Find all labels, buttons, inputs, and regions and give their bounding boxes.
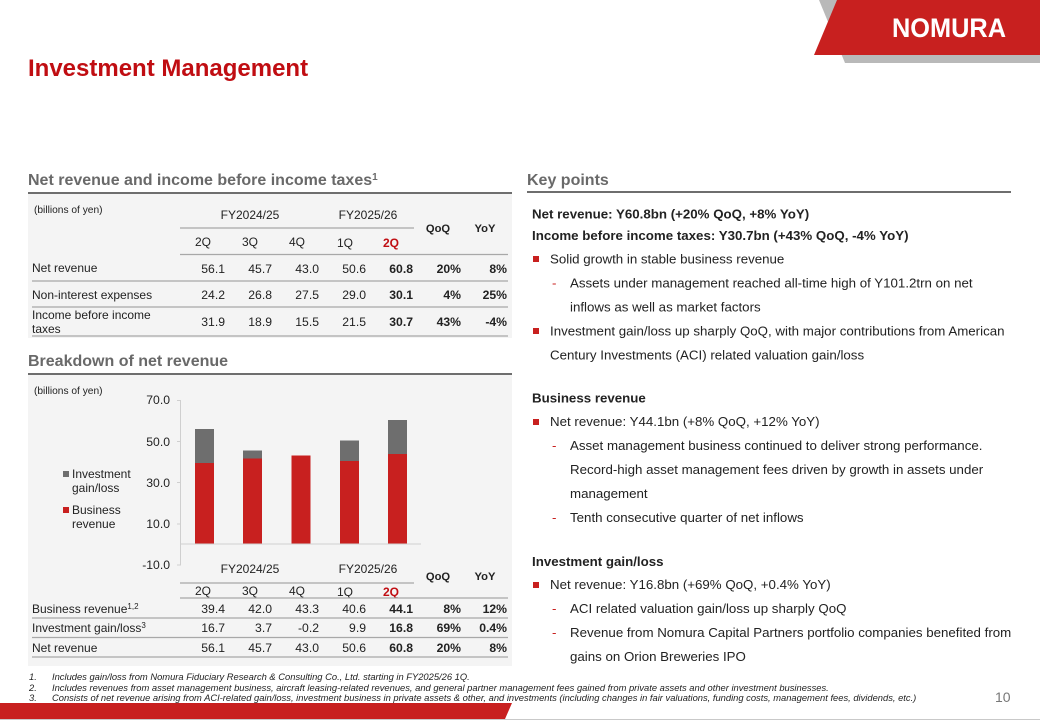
footer band xyxy=(0,703,512,719)
bars xyxy=(195,420,407,544)
section: investment gain/loss: - xyxy=(552,625,556,640)
table row: income before income taxes: taxes xyxy=(32,322,61,336)
heading: breakdown of net revenue: Breakdown of net revenue xyxy=(28,353,228,370)
table row: net revenue: 43.0 xyxy=(295,262,319,276)
table row: income before income taxes: 15.5 xyxy=(295,315,319,329)
table row: net revenue xyxy=(32,261,508,281)
table row: non-interest expenses: 30.1 xyxy=(389,288,413,302)
section: investment gain/loss: Revenue from Nomura Capital Partners portfolio companies benefited from xyxy=(570,625,1011,640)
heading: net revenue and income before income taxes: 1 xyxy=(372,172,378,183)
table header: QoQ xyxy=(426,571,450,583)
heading: key points: Key points xyxy=(527,172,609,189)
table header: YoY xyxy=(475,223,496,235)
table row: net revenue: 60.8 xyxy=(389,262,413,276)
table row: investment gain/loss: 16.7 xyxy=(201,621,225,635)
legend: revenue xyxy=(72,517,116,531)
legend: Investment xyxy=(72,467,131,481)
section: business revenue: Net revenue: Y44.1bn (+8% QoQ, +12% YoY) xyxy=(550,414,820,429)
section: business revenue: - xyxy=(552,510,556,525)
table row: income before income taxes: 21.5 xyxy=(342,315,366,329)
table row: income before income taxes: 31.9 xyxy=(201,315,225,329)
y axis: 10.0 xyxy=(146,517,170,531)
table row: income before income taxes: 30.7 xyxy=(389,315,413,329)
table header: 2Q xyxy=(195,584,211,598)
table header: FY2024/25 xyxy=(221,208,280,222)
table row: business revenue: 39.4 xyxy=(201,602,225,616)
table row: income before income taxes: 18.9 xyxy=(248,315,272,329)
section: investment gain/loss: gains on Orion Breweries IPO xyxy=(570,649,746,664)
table row: business revenue: 44.1 xyxy=(389,602,413,616)
table row: non-interest expenses: Non-interest expenses xyxy=(32,288,152,302)
table row: business revenue: 12% xyxy=(483,602,507,616)
table header xyxy=(180,208,508,254)
table header: QoQ xyxy=(426,223,450,235)
legend xyxy=(63,467,131,531)
table row: business revenue: 8% xyxy=(443,602,461,616)
table header: 4Q xyxy=(289,235,305,249)
bullet: investment gain/loss up: Investment gain/loss up sharply QoQ, with major contributions from American xyxy=(550,324,1005,338)
table header: FY2025/26 xyxy=(339,208,398,222)
section: investment gain/loss: Net revenue: Y16.8bn (+69% QoQ, +0.4% YoY) xyxy=(550,577,831,592)
section: business revenue: Business revenue xyxy=(532,390,646,406)
summary lines xyxy=(532,206,909,243)
table header: 1Q xyxy=(337,236,353,250)
section: investment gain/loss: - xyxy=(552,601,556,616)
table row: business revenue: Business revenue xyxy=(32,602,127,616)
section: business revenue: - xyxy=(552,438,556,453)
panel: breakdown of net revenue xyxy=(28,353,512,666)
logo: Nomura banner: NOMURA xyxy=(892,13,1006,43)
table row: net revenue: Net revenue xyxy=(32,641,98,655)
table header: 4Q xyxy=(289,584,305,598)
table row: non-interest expenses: 27.5 xyxy=(295,288,319,302)
table header: YoY xyxy=(475,571,496,583)
table row: investment gain/loss: -0.2 xyxy=(298,621,319,635)
unit note: (billions of yen) xyxy=(34,205,103,216)
footnotes: 3. xyxy=(29,693,37,703)
table row: non-interest expenses: 25% xyxy=(483,288,507,302)
table row: net revenue: 20% xyxy=(437,262,461,276)
table row: net revenue: 20% xyxy=(437,641,461,655)
table row: non-interest expenses: 26.8 xyxy=(248,288,272,302)
title: Investment Management xyxy=(28,55,308,82)
table header: 2Q xyxy=(383,236,399,250)
legend: Business xyxy=(72,503,121,517)
table header xyxy=(180,562,508,599)
y axis: 70.0 xyxy=(146,393,170,407)
table row: income before income taxes: -4% xyxy=(485,315,507,329)
table row: investment gain/loss: Investment gain/loss xyxy=(32,621,141,635)
table header: 3Q xyxy=(242,235,258,249)
table row: business revenue xyxy=(32,602,508,618)
footnotes: 1. xyxy=(29,672,37,682)
section: investment gain/loss: Investment gain/loss xyxy=(532,554,664,569)
section: business revenue xyxy=(532,390,984,525)
footnotes: Includes revenues from asset management business, aircraft leasing-related revenues, and general partner management fees gained from private assets and other investment businesses. xyxy=(52,683,829,693)
table row: net revenue: 56.1 xyxy=(201,262,225,276)
summary lines: Net revenue: Y60.8bn (+20% QoQ, +8% YoY) xyxy=(532,206,809,222)
page number: 10 xyxy=(995,689,1011,705)
footnotes xyxy=(28,672,916,703)
legend: gain/loss xyxy=(72,481,119,495)
table header: 2Q xyxy=(195,235,211,249)
logo: Nomura banner xyxy=(814,0,1040,63)
table row: net revenue: 8% xyxy=(489,262,507,276)
table row: net revenue: 60.8 xyxy=(389,641,413,655)
table row: net revenue: 45.7 xyxy=(248,641,272,655)
table row: income before income taxes: 43% xyxy=(437,315,461,329)
bullet: solid growth: - xyxy=(552,276,556,290)
table row: income before income taxes xyxy=(32,308,508,336)
bullet: investment gain/loss up xyxy=(533,324,1005,362)
table row: investment gain/loss: 3 xyxy=(141,621,146,630)
table row: net revenue xyxy=(32,641,508,657)
table row: net revenue: 56.1 xyxy=(201,641,225,655)
table row: net revenue: 50.6 xyxy=(342,262,366,276)
table header: 2Q xyxy=(383,585,399,599)
table header: 3Q xyxy=(242,584,258,598)
table header: FY2025/26 xyxy=(339,562,398,576)
footnotes: Consists of net revenue arising from ACI-related gain/loss, investment business in private assets & other, and investments (including changes in fair valuations, funding costs, management fees, dividends, etc.) xyxy=(52,693,916,703)
table row: non-interest expenses: 4% xyxy=(443,288,461,302)
footnotes: 2. xyxy=(28,683,37,693)
table header: FY2024/25 xyxy=(221,562,280,576)
panel: key points xyxy=(527,172,1011,664)
table row: investment gain/loss: 9.9 xyxy=(349,621,366,635)
bullet: solid growth xyxy=(533,252,973,314)
section: investment gain/loss: ACI related valuation gain/loss up sharply QoQ xyxy=(570,601,846,616)
table row: investment gain/loss: 0.4% xyxy=(479,621,507,635)
table row: net revenue: 43.0 xyxy=(295,641,319,655)
table row: investment gain/loss: 69% xyxy=(437,621,461,635)
unit note: (billions of yen) xyxy=(34,386,103,397)
bullet: solid growth: inflows as well as market factors xyxy=(570,300,761,314)
summary lines: Income before income taxes: Y30.7bn (+43% QoQ, -4% YoY) xyxy=(532,228,909,243)
section: business revenue: management xyxy=(570,486,648,501)
table row: non-interest expenses: 24.2 xyxy=(201,288,225,302)
table row: business revenue: 42.0 xyxy=(248,602,272,616)
section: business revenue: Asset management business continued to deliver strong performance. xyxy=(570,438,982,453)
table row: net revenue: 45.7 xyxy=(248,262,272,276)
y axis: 50.0 xyxy=(146,435,170,449)
table row: investment gain/loss xyxy=(32,621,508,638)
heading: net revenue and income before income taxes: Net revenue and income before income taxes xyxy=(28,172,372,189)
table row: non-interest expenses: 29.0 xyxy=(342,288,366,302)
table row: business revenue: 43.3 xyxy=(295,602,319,616)
section: investment gain/loss xyxy=(532,554,1011,664)
y axis xyxy=(142,393,180,572)
table row: investment gain/loss: 3.7 xyxy=(255,621,272,635)
panel: net revenue and income table xyxy=(28,172,512,338)
table row: business revenue: 1,2 xyxy=(127,602,139,611)
y axis: 30.0 xyxy=(146,476,170,490)
table row: net revenue: 50.6 xyxy=(342,641,366,655)
stacked bar chart xyxy=(63,393,421,572)
table row: net revenue: 8% xyxy=(489,641,507,655)
heading: net revenue and income before income taxes xyxy=(28,172,512,194)
bullet: solid growth: Assets under management reached all-time high of Y101.2trn on net xyxy=(570,276,973,290)
bullet: investment gain/loss up: Century Investments (ACI) related valuation gain/loss xyxy=(550,348,864,362)
section: business revenue: Tenth consecutive quarter of net inflows xyxy=(570,510,804,525)
y axis: -10.0 xyxy=(142,558,170,572)
section: business revenue: Record-high asset management fees driven by growth in assets under xyxy=(570,462,984,477)
table row: non-interest expenses xyxy=(32,288,508,307)
table header: 1Q xyxy=(337,585,353,599)
table row: income before income taxes: Income before income xyxy=(32,308,151,322)
bullet: solid growth: Solid growth in stable business revenue xyxy=(550,252,784,266)
table row: business revenue: 40.6 xyxy=(342,602,366,616)
table row: net revenue: Net revenue xyxy=(32,261,98,275)
footnotes: Includes gain/loss from Nomura Fiduciary Research & Consulting Co., Ltd. starting in FY2025/26 1Q. xyxy=(52,672,470,682)
table row: investment gain/loss: 16.8 xyxy=(389,621,413,635)
